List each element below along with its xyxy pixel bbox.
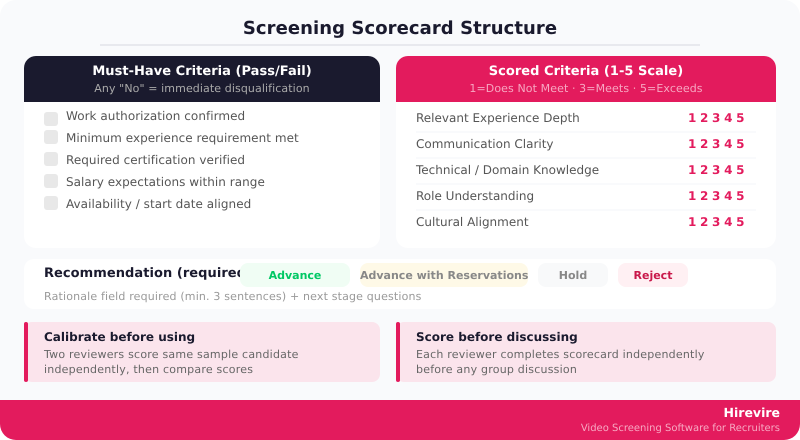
scored heading: Scored Criteria (1-5 Scale): [489, 64, 683, 79]
pill: reject: [618, 263, 688, 287]
checkbox icon 5: [44, 196, 58, 210]
panel: recommendation: [24, 259, 776, 309]
checkbox icon 3: [44, 152, 58, 166]
calibrate text: Two reviewers score same sample candidate: [44, 348, 299, 361]
score text: before any group discussion: [416, 363, 577, 376]
tip: score before discussing: [396, 322, 776, 382]
scored row 5 scale: 1 2 3 4 5: [688, 215, 744, 229]
pill: advance with reservations: Advance with Reservations: [360, 269, 528, 282]
scored row 2 scale: 1 2 3 4 5: [688, 137, 744, 151]
scored row 4 scale: 1 2 3 4 5: [688, 189, 744, 203]
calibrate heading: Calibrate before using: [44, 330, 195, 344]
footer band: [0, 400, 800, 440]
checkbox icon 2: [44, 130, 58, 144]
brand tagline: Video Screening Software for Recruiters: [581, 423, 780, 434]
calibrate text: independently, then compare scores: [44, 363, 253, 376]
criterion 3: Required certification verified: [66, 153, 245, 167]
criterion 2: Minimum experience requirement met: [66, 131, 299, 145]
scored row 5 label: Cultural Alignment: [416, 215, 529, 229]
scored row 1 scale: 1 2 3 4 5: [688, 111, 744, 125]
brand name: Hirevire: [724, 405, 780, 420]
pill: advance with reservations: [360, 263, 528, 287]
criterion 1: Work authorization confirmed: [66, 109, 245, 123]
pill: hold: Hold: [559, 269, 587, 282]
scored row 3 label: Technical / Domain Knowledge: [416, 163, 599, 177]
recommendation note: Rationale field required (min. 3 sentences) + next stage questions: [44, 290, 422, 303]
score heading: Score before discussing: [416, 330, 578, 344]
score text: Each reviewer completes scorecard independently: [416, 348, 705, 361]
pill: hold: [538, 263, 608, 287]
scale legend: 1=Does Not Meet · 3=Meets · 5=Exceeds: [469, 82, 703, 95]
criterion 5: Availability / start date aligned: [66, 197, 251, 211]
scored row 2 label: Communication Clarity: [416, 137, 554, 151]
must-have header: [24, 56, 380, 102]
tip: calibrate: [24, 322, 380, 382]
pill: advance: [240, 263, 350, 287]
panel: must-have criteria: [24, 56, 380, 248]
scored row 1 label: Relevant Experience Depth: [416, 111, 580, 125]
title: Screening Scorecard Structure: [243, 18, 557, 39]
must-have heading: Must-Have Criteria (Pass/Fail): [92, 64, 312, 79]
scored row 3 scale: 1 2 3 4 5: [688, 163, 744, 177]
criterion 4: Salary expectations within range: [66, 175, 265, 189]
calibrate text: [44, 348, 299, 376]
must-have subheading: Any "No" = immediate disqualification: [94, 82, 310, 95]
recommendation heading: Recommendation (required): [44, 266, 252, 281]
scored header: [396, 56, 776, 102]
scored row 4 label: Role Understanding: [416, 189, 534, 203]
checkbox icon 4: [44, 174, 58, 188]
score text: [416, 348, 705, 376]
panel: scored criteria: [396, 56, 776, 248]
pill: advance: Advance: [269, 269, 321, 282]
pill: reject: Reject: [634, 269, 672, 282]
checkbox icon 1: [44, 112, 58, 126]
